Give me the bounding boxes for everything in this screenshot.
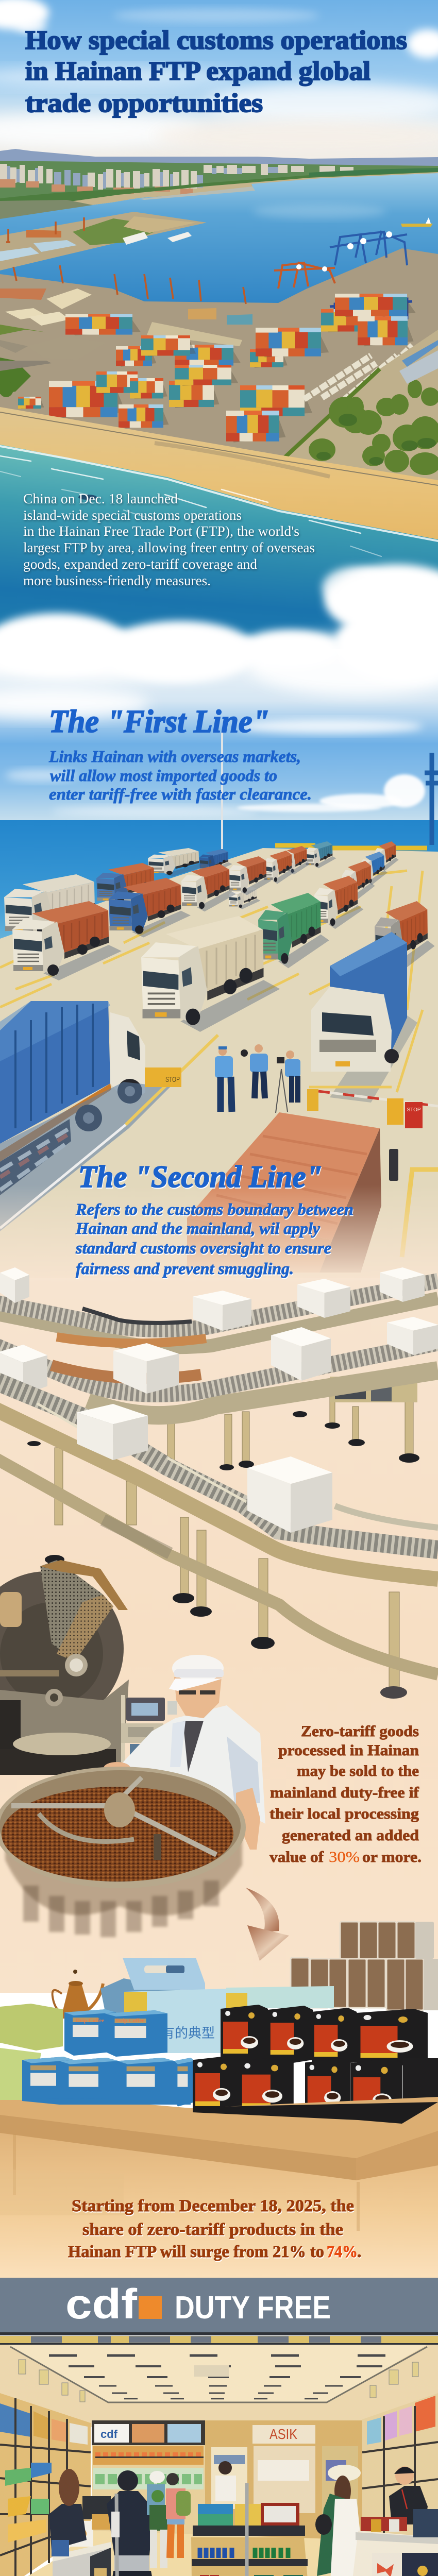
intro text: island-wide special customs operations [23,507,242,523]
title: trade opportunities [25,89,263,118]
intro text: in the Hainan Free Trade Port (FTP), the world's [23,523,299,539]
cdf wall sign: cdf [100,2428,118,2441]
right column trucks [375,841,399,871]
stop barriers [145,1067,438,1128]
section: conveyor line [0,1267,438,1993]
worker in white coat [104,1655,265,1850]
lower boxes [77,1404,332,1533]
back shelving and signs [92,2420,362,2544]
officer middle [241,1044,268,1098]
sea [0,820,438,944]
title: How special customs operations [25,26,407,55]
zero-tariff text: mainland duty-free if [270,1784,419,1801]
zero-tariff text: their local processing [269,1805,419,1822]
ASIK sign: ASIK [269,2426,297,2442]
security gates [110,2483,254,2576]
ocean water [0,445,438,654]
zero-tariff text: value of [269,1849,324,1866]
distant hills [0,149,438,175]
blue gift boxes: 有的典型 [161,2023,215,2042]
officer right [276,1050,300,1113]
sea [0,173,438,309]
curved arrow [246,1888,289,1961]
roasting pan with coffee beans [0,1767,246,1937]
section: cdf duty free store [0,2278,438,2576]
center product display [191,2503,310,2576]
zero-tariff text: may be sold to the [297,1762,419,1780]
Second Line heading and text [75,1160,353,1278]
zero-tariff text: processed in Hainan [278,1742,419,1759]
intro text: more business-friendly measures. [23,573,211,588]
quay ground [0,848,438,1278]
zero-tariff text: generated an added [282,1827,419,1844]
blue crane at right [425,753,438,845]
Second Line heading and text: Hainan and the mainland, wil apply [75,1219,321,1238]
ASIK sign [252,2425,315,2444]
cloud transition between hero and First Line [0,564,438,683]
pier with warehouses [0,187,255,270]
Second Line heading and text: The "Second Line" [78,1160,323,1194]
yellow ground markings [0,871,423,1010]
title: in Hainan FTP expand global [25,57,370,86]
green belt and trees [0,330,438,484]
white container rows [304,345,412,401]
clouds [0,0,438,152]
sandy beach [0,407,438,539]
mid conveyor [0,1343,438,1415]
copper kettle [53,1970,103,2019]
cdf wall sign [94,2424,129,2443]
stop barriers: STOP [407,1107,421,1113]
redraw box bases on counter [22,2098,438,2124]
drip coffee boxes: Drip Coffee [76,2018,104,2024]
container stacks [18,294,416,443]
intro text [23,491,315,588]
green tea boxes [0,2004,63,2105]
title [25,26,407,118]
drip coffee boxes [22,2009,195,2106]
blue shadow on ground [0,1082,170,1231]
zero-tariff share text [68,2197,361,2261]
roaster machine [0,1560,129,1775]
customs officers [215,1044,300,1113]
lamp post [221,732,223,849]
right wall shelves [362,2393,438,2550]
intro text: largest FTP by area, allowing freer entry of overseas [23,540,315,555]
section: Second Line customs checkpoint [0,1010,438,1283]
cdf logo: cdf [65,2281,138,2328]
upper conveyor [0,1281,438,1347]
zero-tariff text: or more. [362,1849,422,1866]
surf foam [0,446,438,556]
far shopper [215,2461,236,2501]
conveyor legs [55,1381,413,1690]
zero-tariff share text: share of zero-tariff products in the [82,2221,343,2239]
zero-tariff share text: Starting from December 18, 2025, the [72,2197,354,2215]
wooden counter [0,2097,438,2278]
back curved rail [335,1506,438,1528]
shopper with brown hair [49,2469,87,2556]
zero-tariff share text: 74% [327,2243,358,2261]
cargo ship at sea [401,217,433,227]
First Line heading and text: The "First Line" [49,704,269,739]
zero-tariff text: 30% [329,1849,360,1866]
blue gift boxes [100,1958,334,2053]
woman in white dress [315,2465,366,2576]
duty free lettering: DUTY FREE [175,2290,331,2326]
section: hero harbor illustration [0,0,438,654]
city skyline buildings [0,164,353,195]
far trucks [229,886,260,909]
city land and shoreline [0,161,438,217]
drip coffee boxes: Drip Coffee [116,2018,144,2024]
store sign band [0,2278,438,2345]
big blue truck right [311,932,417,1103]
cashier stand left [53,2496,112,2576]
cdf logo [65,2281,162,2328]
officer left [215,1046,233,1112]
orange container [187,1112,398,1273]
Second Line heading and text: standard customs oversight to ensure [75,1239,331,1257]
section: coffee products on counter [0,1922,438,2278]
section: coffee roasting [0,1560,422,1961]
sky background [0,0,438,165]
zero-tariff share text: Hainan FTP will surge from 21% to [68,2243,324,2261]
control panel [121,1698,177,1765]
stop barriers: STOP [165,1075,180,1084]
upper and mid boxes [0,1267,438,1395]
coffee cans [291,1922,438,2010]
motor frame [330,1377,417,1402]
zero-tariff text [269,1723,422,1866]
paper floor [0,1282,438,1993]
warehouses and yard pads [0,289,252,394]
lower conveyor [0,1381,438,1579]
sky with clouds [0,649,438,822]
shoppers group [147,2471,191,2568]
shopper in dark shirt [107,2470,156,2576]
cashier man [389,2466,428,2524]
port land [0,248,438,484]
intro text: goods, expanded zero-tariff coverage and [23,556,258,572]
Second Line heading and text: Refers to the customs boundary between [75,1200,353,1218]
blue and orange gantry cranes [274,231,412,322]
section: First Line port scene [0,634,438,1278]
First Line heading and text: enter tariff-free with faster clearance. [49,785,312,803]
zero-tariff share text: . [357,2243,361,2261]
zero-tariff text: Zero-tariff goods [301,1723,419,1740]
Second Line heading and text: fairness and prevent smuggling. [76,1259,294,1278]
fade to paper [0,1185,438,1283]
yellow quay barrier [275,845,427,848]
lower support rail [0,1458,438,1674]
tree belt [0,170,438,211]
KAFFA black boxes [193,2005,438,2125]
First Line heading and text [48,704,312,803]
intro text: China on Dec. 18 launched [23,491,178,506]
ceiling with lights [0,2345,438,2427]
trucks [0,841,435,1195]
store floor [0,2531,438,2576]
harbor cranes [6,217,246,304]
big blue truck left [0,1001,145,1195]
register counter with floral panels [349,2509,438,2576]
left wall shelves [0,2393,91,2576]
First Line heading and text: will allow most imported goods to [50,766,277,785]
First Line heading and text: Links Hainan with overseas markets, [48,747,301,766]
